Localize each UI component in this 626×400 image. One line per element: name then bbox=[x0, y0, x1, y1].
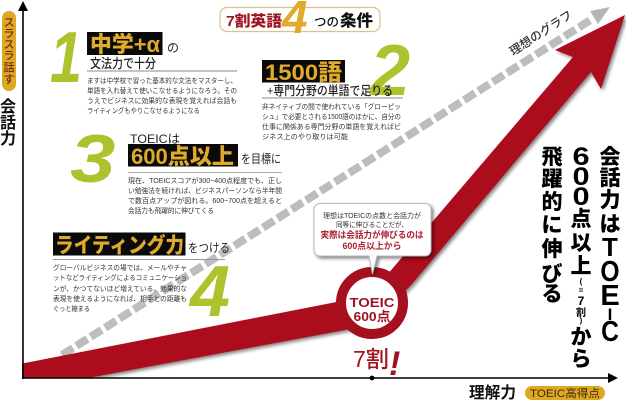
condition 2: ジネス上のやり取りは可能 bbox=[262, 132, 348, 141]
y axis pill: smooth speech: ス bbox=[4, 17, 14, 29]
condition 3: い勉強法を続ければ、ビジネスパーソンなら半年間 bbox=[128, 186, 282, 195]
ideal graph dashed arrow bbox=[62, 7, 610, 355]
title box bbox=[220, 0, 380, 43]
condition 3: を目標に bbox=[241, 152, 281, 166]
7 wari label: 7割 bbox=[353, 346, 389, 372]
condition 2: +専門分野の単語で足りる bbox=[267, 83, 393, 98]
headline column 2: 上 bbox=[570, 255, 592, 278]
numeral 3: 3 bbox=[70, 120, 115, 196]
condition 3: 現在、TOEICスコアが300~400点程度でも、正し bbox=[128, 176, 282, 185]
callout bubble bbox=[314, 204, 431, 274]
callout bubble: 実際は会話力が伸びるのは bbox=[320, 229, 424, 240]
headline column 1: 会 bbox=[600, 146, 620, 169]
headline column 2: 割 bbox=[576, 306, 586, 319]
headline column 3: に bbox=[542, 214, 562, 237]
headline column 1: C bbox=[601, 315, 619, 347]
headline column 1: I bbox=[608, 305, 612, 324]
y axis label: speaking ability bbox=[0, 98, 16, 148]
headline column 1: O bbox=[600, 255, 620, 287]
y axis pill: smooth speech bbox=[2, 11, 16, 91]
condition 3 bbox=[128, 132, 282, 215]
y axis pill: smooth speech: ス bbox=[4, 39, 14, 51]
title box: 条件 bbox=[340, 11, 373, 30]
title box: 7割英語 bbox=[226, 12, 282, 30]
condition 3: 600点以上 bbox=[131, 144, 234, 169]
callout bubble: 理想はTOEICの点数と会話力が bbox=[323, 211, 421, 220]
x axis pill: TOEIC high score: TOEIC高得点 bbox=[530, 386, 600, 400]
headline column 2: 点 bbox=[570, 208, 592, 231]
headline column 2: 7 bbox=[578, 294, 585, 308]
condition 4: をつける bbox=[188, 241, 230, 255]
condition 4: ぐっと縮まる bbox=[53, 304, 90, 313]
y axis pill: smooth speech: ラ bbox=[4, 27, 14, 40]
headline column 2: 0 bbox=[572, 183, 590, 210]
headline column 2: 以 bbox=[570, 232, 592, 255]
y axis pill: smooth speech: す bbox=[4, 73, 14, 86]
headline column 3: 飛 bbox=[542, 146, 562, 169]
condition 2: 仕事に関係ある専門分野の単語を覚えればビ bbox=[262, 122, 401, 131]
y axis label: speaking ability: 力 bbox=[0, 130, 16, 148]
TOEIC 600 circle marker bbox=[341, 272, 403, 334]
headline column 2: か bbox=[570, 326, 592, 349]
condition 2: 非ネイティブの間で使われている「グローピッ bbox=[262, 102, 401, 111]
headline column 1: E bbox=[600, 280, 620, 312]
TOEIC 600 circle marker: TOEIC bbox=[350, 295, 395, 310]
condition 1 bbox=[87, 32, 237, 115]
condition 4: ンが、かつてないほど増えている。効果的な bbox=[53, 284, 187, 293]
headline column 1: は bbox=[600, 213, 620, 236]
condition 1: 文法力で十分 bbox=[90, 56, 156, 71]
condition 1: ますは中学校で習った基本的な文法をマスターし、 bbox=[87, 76, 237, 85]
condition 3: TOEICは bbox=[130, 132, 180, 146]
headline column 3: る bbox=[542, 283, 562, 306]
headline column 3: び bbox=[542, 263, 562, 286]
TOEIC 600 circle marker: 600点 bbox=[354, 309, 390, 324]
headline column 1 bbox=[600, 146, 620, 347]
condition 2: シュ」で必要とされる1500語のほかに、自分の bbox=[262, 112, 401, 121]
y axis label: speaking ability: 会 bbox=[0, 98, 16, 116]
headline column 1: 話 bbox=[600, 167, 620, 190]
headline column 3: 伸 bbox=[542, 238, 562, 261]
condition 4: ットなどライティングによるコミュニケーショ bbox=[53, 273, 187, 282]
headline column 1: T bbox=[602, 232, 618, 262]
condition 4: 表現を使えるようになれば、相手との距離も bbox=[53, 294, 187, 303]
condition 1: の bbox=[167, 41, 179, 55]
x axis bbox=[22, 373, 618, 383]
headline column 3: 的 bbox=[542, 191, 562, 214]
condition 4: グローバルビジネスの場では、メールやチャ bbox=[53, 263, 187, 272]
y axis pill: smooth speech: ラ bbox=[4, 49, 14, 62]
numeral 4: 4 bbox=[188, 252, 230, 332]
condition 1: うえでビジネスに効果的な表現を覚えれば会話も bbox=[87, 96, 237, 105]
label: ideal graph: 理想のグラフ bbox=[506, 7, 575, 59]
callout bubble: 600点以上から bbox=[342, 240, 402, 251]
callout bubble: 同等に伸びることだが、 bbox=[336, 220, 408, 229]
y axis pill: smooth speech: 話 bbox=[4, 61, 14, 74]
headline column 2: ら bbox=[570, 348, 592, 371]
headline column 2: 6 bbox=[572, 143, 590, 170]
7 wari label: ! bbox=[389, 345, 400, 383]
condition 4: ライティング力 bbox=[55, 234, 184, 258]
condition 1: 単語を入れ替えて使いこなせるようになろう。その bbox=[87, 86, 237, 95]
headline column 3 bbox=[542, 146, 562, 306]
headline column 1: 力 bbox=[600, 189, 620, 212]
headline column 2: ) bbox=[580, 316, 583, 325]
headline column 3: 躍 bbox=[542, 168, 562, 191]
numeral 1: 1 bbox=[50, 17, 82, 97]
condition 1: ライティングもやりこなせるようになる bbox=[87, 106, 200, 115]
y axis bbox=[18, 1, 28, 379]
condition 1: 中学+α bbox=[90, 32, 160, 57]
title box: つの bbox=[314, 15, 339, 29]
condition 3: 会話力も飛躍的に伸びてくる bbox=[128, 206, 214, 215]
7 wari label bbox=[353, 345, 400, 383]
numeral 2: 2 bbox=[368, 31, 410, 111]
headline column 2 bbox=[570, 143, 592, 371]
condition 2 bbox=[262, 60, 403, 141]
headline column 2: = bbox=[579, 286, 584, 295]
y axis label: speaking ability: 話 bbox=[0, 114, 16, 132]
condition 4 bbox=[53, 232, 230, 313]
condition 2: 1500語 bbox=[265, 60, 342, 85]
headline column 2: ( bbox=[580, 277, 583, 286]
headline column 2: 0 bbox=[572, 163, 590, 190]
condition 3: で数百点アップが図れる。600~700点を超えると bbox=[128, 196, 282, 205]
